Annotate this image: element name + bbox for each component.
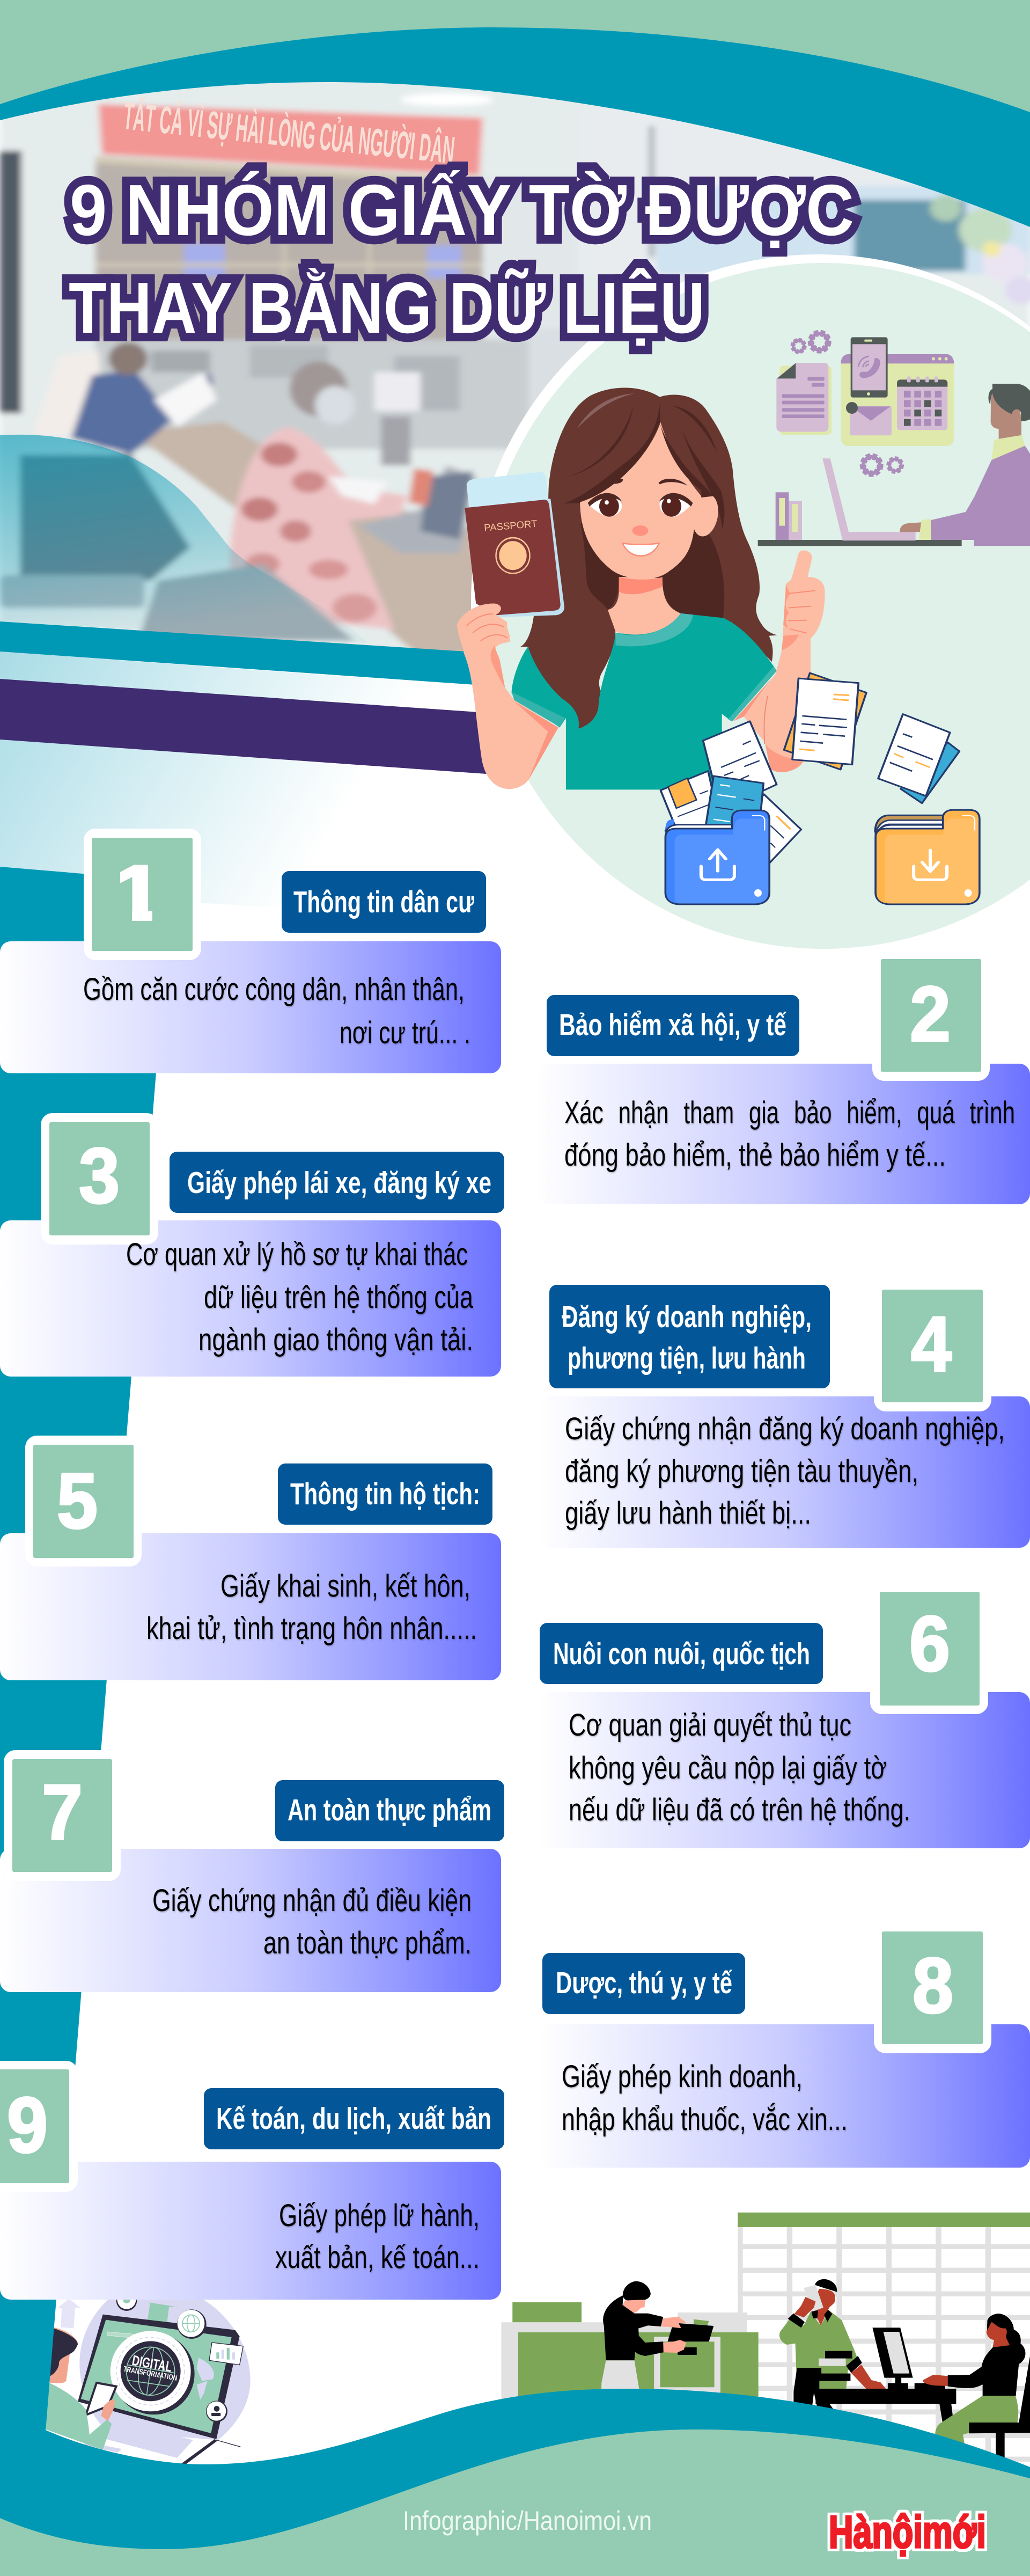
hand holding passport bbox=[457, 603, 510, 688]
panel: translucent teal shape over photo bbox=[0, 435, 367, 643]
label: Kế toán, du lịch, xuất bản bbox=[216, 2102, 491, 2136]
panel: teal band bbox=[0, 621, 483, 685]
label bbox=[542, 1953, 745, 2014]
description: Giấy chứng nhận đủ điều kiện bbox=[152, 1883, 472, 1918]
face bbox=[580, 422, 722, 579]
title: 9 NHÓM GIẤY TỜ ĐƯỢC bbox=[70, 170, 854, 251]
description bbox=[564, 1095, 1015, 1173]
label: Bảo hiểm xã hội, y tế bbox=[559, 1008, 786, 1042]
panel: circle behind character bbox=[471, 254, 1030, 949]
number 7: 7 bbox=[42, 1768, 83, 1856]
label bbox=[275, 1780, 504, 1841]
footer credit: Infographic/Hanoimoi.vn bbox=[403, 2506, 652, 2536]
label: Giấy phép lái xe, đăng ký xe bbox=[187, 1166, 491, 1200]
passport: PASSPORT bbox=[483, 518, 538, 533]
description: Giấy phép kinh doanh, bbox=[562, 2059, 803, 2094]
panel: item 9 kế toán du lịch bbox=[0, 2061, 504, 2300]
panel: bottom green wave bbox=[0, 2429, 1030, 2576]
description: nơi cư trú... . bbox=[340, 1015, 470, 1050]
description: giấy lưu hành thiết bị... bbox=[565, 1496, 811, 1531]
panel: item 4 đăng ký doanh nghiệp bbox=[539, 1280, 1030, 1548]
photo: citizens at public service counter bbox=[0, 77, 1030, 657]
description: Giấy khai sinh, kết hôn, bbox=[220, 1569, 470, 1604]
document stack centre bbox=[784, 673, 866, 770]
description: Gồm căn cước công dân, nhân thân, bbox=[83, 972, 465, 1007]
label bbox=[547, 995, 799, 1056]
label bbox=[540, 1623, 823, 1684]
description bbox=[562, 2059, 848, 2137]
description: nhập khẩu thuốc, vắc xin... bbox=[562, 2102, 848, 2137]
description: nếu dữ liệu đã có trên hệ thống. bbox=[569, 1792, 910, 1827]
neck bbox=[608, 577, 681, 635]
panel: item 5 thông tin hộ tịch bbox=[0, 1436, 501, 1680]
label: Đăng ký doanh nghiệp, bbox=[562, 1300, 812, 1334]
description: Cơ quan xử lý hồ sơ tự khai thác bbox=[126, 1237, 468, 1272]
panel: gradient background under bands bbox=[0, 652, 536, 923]
description bbox=[569, 1708, 910, 1827]
number 3: 3 bbox=[79, 1132, 120, 1219]
description bbox=[126, 1237, 474, 1357]
description: đăng ký phương tiện tàu thuyền, bbox=[565, 1454, 918, 1489]
left arm bbox=[464, 652, 558, 789]
description: dữ liệu trên hệ thống của bbox=[204, 1280, 474, 1315]
number 8: 8 bbox=[913, 1942, 953, 2029]
title bbox=[69, 170, 854, 348]
panel: item 6 nuôi con nuôi bbox=[539, 1583, 1030, 1848]
person with folder bbox=[601, 2281, 713, 2397]
label: Thông tin dân cư bbox=[293, 885, 475, 919]
description bbox=[83, 972, 470, 1050]
panel: top wave green and teal bbox=[0, 0, 1030, 227]
label bbox=[204, 2088, 504, 2149]
document pair right bbox=[878, 714, 959, 803]
illustration: folders and documents bbox=[660, 673, 980, 904]
description bbox=[565, 1411, 1005, 1531]
number 1: 1 bbox=[111, 849, 165, 936]
number 2: 2 bbox=[910, 970, 951, 1058]
text: transformation: TRANSFORMATION bbox=[123, 2365, 178, 2382]
number 9: 9 bbox=[7, 2081, 48, 2169]
description: an toàn thực phẩm. bbox=[263, 1926, 472, 1960]
label bbox=[549, 1285, 830, 1388]
label: Dược, thú y, y tế bbox=[556, 1966, 732, 2000]
label bbox=[282, 871, 486, 933]
panel: item 8 dược thú y bbox=[539, 1922, 1030, 2168]
number 6: 6 bbox=[909, 1600, 950, 1687]
description bbox=[146, 1569, 477, 1646]
label bbox=[278, 1463, 492, 1525]
label: phương tiện, lưu hành bbox=[568, 1341, 806, 1375]
label: Thông tin hộ tịch: bbox=[290, 1477, 480, 1511]
person on phone bbox=[779, 2279, 887, 2415]
number 4: 4 bbox=[911, 1300, 952, 1388]
text: digital: DIGITAL bbox=[131, 2352, 173, 2375]
panel: item 2 bảo hiểm bbox=[536, 949, 1030, 1204]
text: banner in photo: TẤT CẢ VÌ SỰ HÀI LÒNG CỦA NGƯỜI DÂN bbox=[121, 94, 457, 172]
panel: bottom teal wave bbox=[0, 2389, 1030, 2576]
illustration: online work desk bbox=[758, 333, 1030, 546]
label: An toàn thực phẩm bbox=[288, 1793, 491, 1827]
description: khai tử, tình trạng hôn nhân..... bbox=[146, 1611, 477, 1646]
panel: item 7 an toàn thực phẩm bbox=[0, 1750, 504, 1992]
description: không yêu cầu nộp lại giấy tờ bbox=[569, 1751, 887, 1785]
label bbox=[170, 1152, 504, 1213]
documents over blue folder bbox=[660, 721, 801, 863]
illustration: girl with passport bbox=[457, 387, 825, 789]
description: Cơ quan giải quyết thủ tục bbox=[569, 1708, 851, 1743]
right arm bbox=[744, 639, 811, 772]
panel: item 3 giấy phép lái xe bbox=[0, 1113, 504, 1377]
label: Nuôi con nuôi, quốc tịch bbox=[553, 1637, 810, 1671]
folder blue bbox=[665, 810, 769, 904]
description: ngành giao thông vận tải. bbox=[198, 1322, 473, 1357]
hair bbox=[520, 387, 777, 729]
panel: left teal column bbox=[0, 867, 172, 2431]
panel: illustration digital transformation bbox=[46, 2290, 251, 2464]
panel: item 1 thông tin dân cư bbox=[0, 829, 501, 1073]
description: Giấy phép lữ hành, bbox=[279, 2198, 480, 2233]
thumbs-up hand bbox=[782, 550, 825, 651]
t-shirt bbox=[512, 613, 777, 789]
description: xuất bản, kế toán... bbox=[275, 2240, 480, 2275]
desk with computer bbox=[815, 2328, 956, 2443]
title: THAY BẰNG DỮ LIỆU bbox=[69, 267, 705, 348]
description bbox=[275, 2198, 480, 2275]
description bbox=[152, 1883, 472, 1960]
seated woman bbox=[923, 2314, 1030, 2460]
panel: purple band bbox=[0, 679, 494, 774]
number 5: 5 bbox=[57, 1457, 98, 1545]
panel: office illustration bbox=[501, 2213, 1030, 2479]
passport bbox=[465, 472, 564, 617]
folder orange bbox=[875, 810, 980, 904]
